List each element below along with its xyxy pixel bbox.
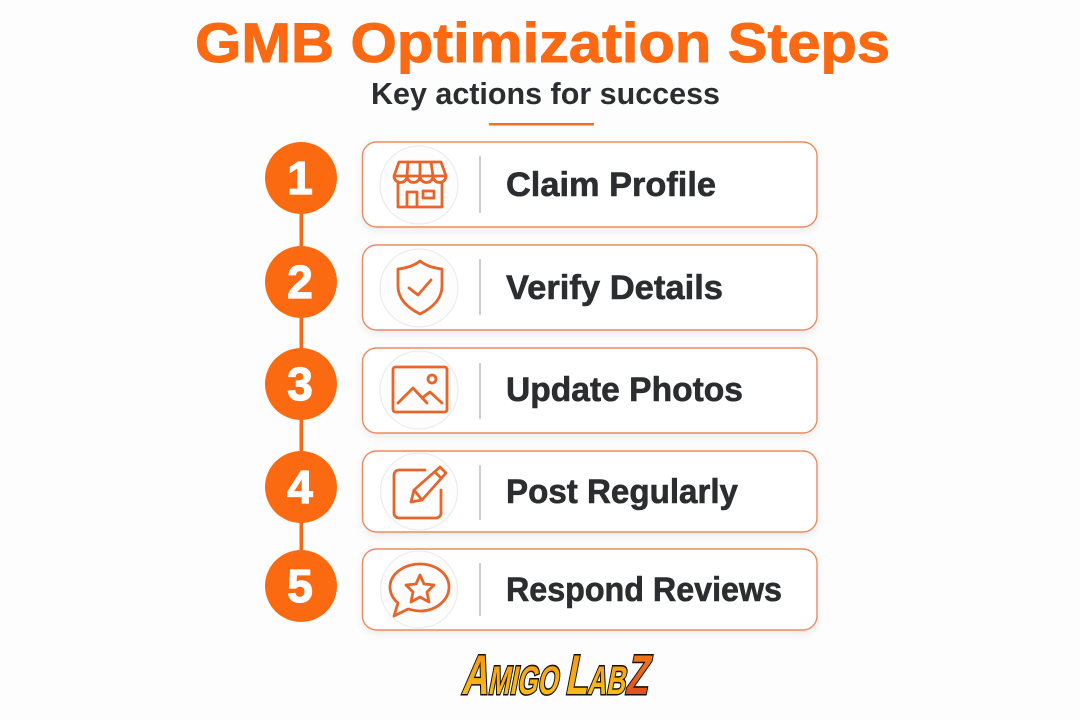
icon: storefront — [380, 146, 458, 224]
step 2 number badge — [265, 246, 337, 318]
title: GMB Optimization Steps — [195, 11, 890, 74]
icon: review bubble star — [380, 551, 458, 628]
step 5 number badge: 5 — [287, 560, 313, 612]
step 3 number badge — [265, 348, 337, 420]
step 4 divider — [479, 465, 481, 520]
step 2 divider — [479, 259, 481, 315]
step 3 number badge: 3 — [287, 358, 313, 410]
subtitle: Key actions for success — [371, 76, 720, 111]
step 4 number badge: 4 — [287, 461, 313, 513]
step 1 divider — [479, 156, 481, 213]
step 2 card — [362, 245, 817, 330]
step 3 card — [362, 348, 817, 433]
step 1 label: Claim Profile — [506, 166, 716, 204]
step 2 number badge: 2 — [287, 256, 313, 308]
step 1 number badge: 1 — [287, 152, 313, 204]
step 4 label: Post Regularly — [506, 473, 738, 511]
step 4 card — [362, 451, 817, 532]
step 1 number badge — [265, 142, 337, 214]
icon: photo — [380, 351, 458, 429]
step 3 divider — [479, 363, 481, 419]
step 5 — [265, 549, 817, 630]
timeline connector — [300, 200, 303, 570]
title underline — [489, 123, 594, 126]
step 5 divider — [479, 563, 481, 616]
step 2 label: Verify Details — [506, 269, 723, 307]
step 5 number badge — [265, 550, 337, 622]
step 2 — [265, 245, 817, 330]
step 4 number badge — [265, 451, 337, 523]
step 5 card — [362, 549, 817, 630]
step 1 card — [362, 142, 817, 227]
icon: edit pencil — [380, 453, 458, 530]
step 1 — [265, 142, 817, 227]
icon: shield check — [380, 249, 458, 327]
step 3 label: Update Photos — [506, 371, 743, 409]
step 5 label: Respond Reviews — [506, 571, 782, 609]
step 4 — [265, 451, 817, 532]
logo: AMIGO LABZ — [459, 643, 657, 706]
step 3 — [265, 348, 817, 433]
